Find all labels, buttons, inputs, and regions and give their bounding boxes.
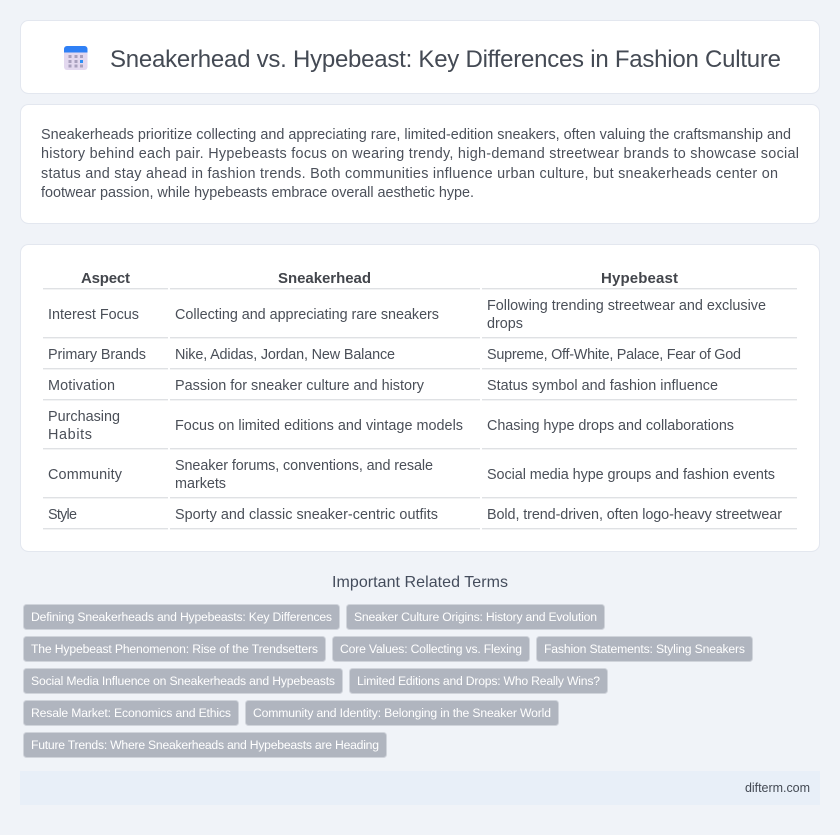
row: purchasing habits: Habits	[48, 427, 92, 443]
tag	[24, 604, 340, 630]
tag	[24, 732, 386, 758]
tag	[246, 700, 558, 726]
tag: Social Media Influence on Sneakerheads and Hypebeasts	[31, 674, 335, 688]
tag: Future Trends: Where Sneakerheads and Hypebeasts are Heading	[31, 738, 379, 752]
row: primary brands	[48, 347, 741, 363]
tag	[24, 700, 238, 726]
panel: intro	[20, 104, 820, 224]
tag: Resale Market: Economics and Ethics	[31, 706, 231, 720]
row: interest focus	[48, 298, 766, 332]
tag	[346, 604, 604, 630]
row: primary brands: Primary Brands	[48, 347, 146, 363]
row: purchasing habits: Focus on limited editions and vintage models	[175, 418, 463, 434]
row: motivation	[48, 378, 718, 394]
row: motivation: Status symbol and fashion influence	[487, 378, 718, 394]
row: style: Sporty and classic sneaker-centric outfits	[175, 507, 438, 523]
tag: Sneaker Culture Origins: History and Evolution	[354, 610, 597, 624]
heading: important related terms: Important Related Terms	[332, 574, 508, 591]
related term tags	[24, 604, 752, 758]
intro text: Sneakerheads prioritize collecting and appreciating rare, limited-edition sneakers, often valuing the craftsmanship and	[41, 127, 791, 143]
table rules	[43, 288, 797, 529]
table header: Hypebeast	[601, 270, 678, 287]
row: interest focus: Interest Focus	[48, 307, 139, 323]
intro text	[41, 127, 799, 201]
row: motivation: Passion for sneaker culture and history	[175, 378, 425, 394]
row: style: Style	[48, 507, 77, 523]
row: style: Bold, trend-driven, often logo-heavy streetwear	[487, 507, 782, 523]
intro text: history behind each pair. Hypebeasts focus on wearing trendy, high-demand streetwear brands to showcase social	[41, 146, 799, 162]
table header: Aspect	[81, 270, 130, 287]
table header	[81, 270, 678, 287]
row: purchasing habits: Chasing hype drops and collaborations	[487, 418, 734, 434]
row: community: Community	[48, 467, 123, 483]
tag: Core Values: Collecting vs. Flexing	[340, 642, 522, 656]
row: community: Social media hype groups and fashion events	[487, 467, 775, 483]
tag	[24, 668, 342, 694]
tag	[24, 636, 326, 662]
table header: Sneakerhead	[278, 270, 371, 287]
tag	[536, 636, 752, 662]
intro text: status and stay ahead in fashion trends. Both communities influence urban culture, but sneakerheads center on	[41, 166, 778, 182]
panel: header	[20, 20, 820, 94]
tag: Fashion Statements: Styling Sneakers	[544, 642, 745, 656]
row: primary brands: Supreme, Off-White, Palace, Fear of God	[487, 347, 741, 363]
intro text: footwear passion, while hypebeasts embrace overall aesthetic hype.	[41, 185, 474, 201]
row: primary brands: Nike, Adidas, Jordan, New Balance	[175, 347, 395, 363]
icon: calendar	[64, 46, 88, 70]
row: motivation: Motivation	[48, 378, 115, 394]
row: community: Sneaker forums, conventions, and resale	[175, 458, 433, 474]
row: community: markets	[175, 476, 226, 492]
panel: comparison table	[20, 244, 820, 552]
row: community	[48, 458, 775, 492]
tag: Limited Editions and Drops: Who Really Wins?	[357, 674, 600, 688]
row: purchasing habits: Purchasing	[48, 409, 120, 425]
footer site name: difterm.com	[745, 781, 810, 795]
tag: Defining Sneakerheads and Hypebeasts: Key Differences	[31, 610, 332, 624]
footer	[20, 771, 820, 805]
tag: Community and Identity: Belonging in the Sneaker World	[253, 706, 551, 720]
row: style	[48, 507, 782, 523]
title: Sneakerhead vs. Hypebeast: Key Differences in Fashion Culture	[110, 46, 781, 73]
tag	[350, 668, 608, 694]
row: interest focus: drops	[487, 316, 523, 332]
row: interest focus: Collecting and appreciating rare sneakers	[175, 307, 439, 323]
row: purchasing habits	[48, 409, 734, 443]
tag: The Hypebeast Phenomenon: Rise of the Trendsetters	[31, 642, 318, 656]
row: interest focus: Following trending streetwear and exclusive	[487, 298, 766, 314]
tag	[332, 636, 530, 662]
